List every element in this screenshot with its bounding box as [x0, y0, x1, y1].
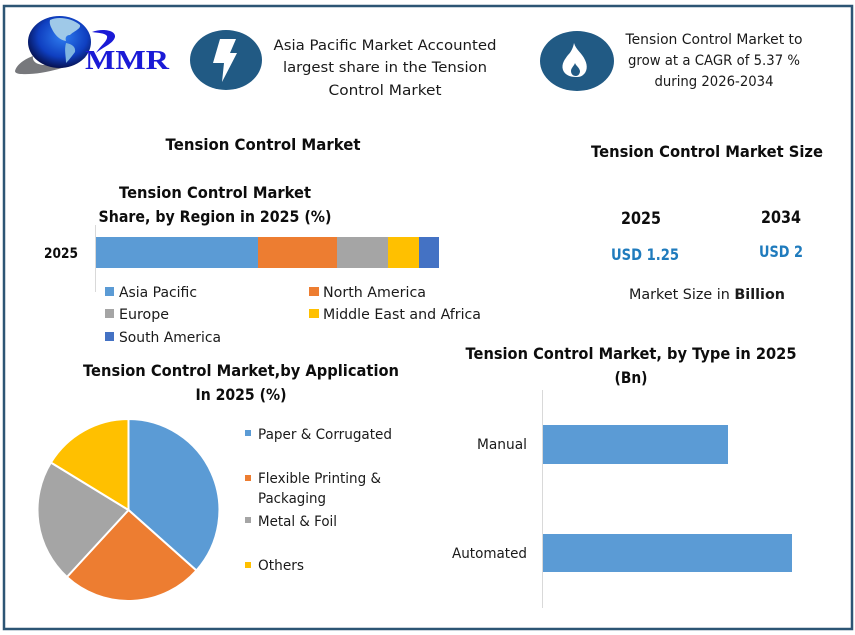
- callout: Asia Pacific share: Asia Pacific Market Accounted: [274, 38, 496, 54]
- callout: CAGR: grow at a CAGR of 5.37 %: [628, 53, 800, 69]
- icon: flame: [540, 31, 614, 91]
- chart heading: [466, 344, 796, 387]
- region legend: North America: [323, 285, 426, 301]
- panel: market size values: [611, 208, 803, 303]
- horizontal bar chart: Automated: [452, 546, 527, 562]
- callout: CAGR: during 2026-2034: [654, 74, 774, 90]
- value 2034: USD 2: [759, 242, 803, 261]
- callout: Asia Pacific share: Control Market: [328, 83, 442, 99]
- year 2025: 2025: [621, 209, 661, 229]
- application legend: Others: [258, 558, 304, 574]
- icon: lightning bolt: [190, 30, 262, 90]
- chart heading: Share, by Region in 2025 (%): [98, 207, 332, 226]
- panel: by application: [38, 361, 399, 601]
- chart heading: (Bn): [614, 368, 648, 387]
- region legend: Middle East and Africa: [323, 307, 481, 323]
- chart heading: Tension Control Market: [119, 183, 311, 202]
- logo wordmark: MMR: [85, 45, 170, 75]
- value 2025: USD 1.25: [611, 245, 679, 264]
- panel: by type: [452, 344, 796, 608]
- stacked bar chart: [44, 225, 439, 292]
- heading: main title: Tension Control Market: [166, 135, 361, 154]
- unit note: Market Size in Billion: [629, 287, 785, 303]
- panel: share by region: [44, 183, 481, 346]
- application legend: [245, 427, 392, 574]
- callout: CAGR: Tension Control Market to: [625, 32, 803, 48]
- chart heading: Tension Control Market,by Application: [83, 361, 399, 380]
- stacked bar chart: 2025: [44, 246, 78, 262]
- horizontal bar chart: Manual: [477, 437, 527, 453]
- region legend: Asia Pacific: [119, 285, 197, 301]
- chart heading: [83, 361, 399, 404]
- region legend: Europe: [119, 307, 169, 323]
- callout: Asia Pacific share: [274, 38, 496, 99]
- chart heading: Tension Control Market, by Type in 2025: [466, 344, 796, 363]
- year 2034: 2034: [761, 208, 801, 228]
- region legend: [105, 285, 481, 346]
- chart heading: [98, 183, 332, 226]
- application legend: Packaging: [258, 491, 326, 507]
- pie chart: [38, 419, 219, 601]
- application legend: Flexible Printing &: [258, 471, 381, 487]
- logo: MMR globe: [15, 16, 170, 75]
- callout: CAGR: [625, 32, 803, 90]
- application legend: Paper & Corrugated: [258, 427, 392, 443]
- heading: market size: Tension Control Market Size: [591, 142, 823, 161]
- region legend: South America: [119, 330, 221, 346]
- callout: Asia Pacific share: largest share in the Tension: [283, 60, 487, 76]
- application legend: Metal & Foil: [258, 514, 337, 530]
- chart heading: In 2025 (%): [196, 385, 286, 404]
- horizontal bar chart: [452, 390, 792, 608]
